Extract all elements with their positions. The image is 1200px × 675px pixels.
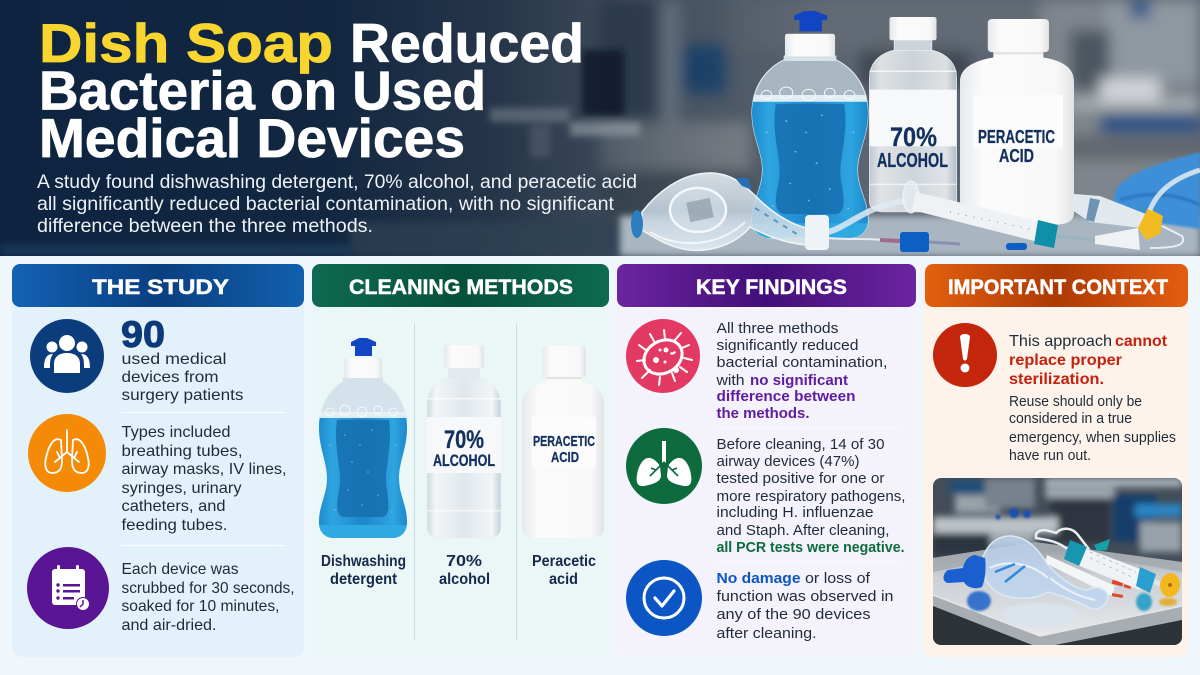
bottle: peracetic acid — [960, 19, 1074, 224]
airway mask and tube — [631, 173, 905, 250]
text: reuse note: considered in a true — [1009, 410, 1132, 427]
text: procedure: scrubbed for 30 seconds, — [122, 580, 294, 597]
method: 70% alcohol: 70% — [446, 553, 482, 570]
bottle: peracetic acid: PERACETIC — [978, 127, 1055, 147]
text: device types: catheters, and — [122, 498, 226, 515]
method: peracetic acid: ACID — [551, 449, 579, 466]
heading: the study — [12, 264, 304, 307]
heading: key findings — [617, 264, 916, 307]
subtitle: difference between the three methods. — [37, 215, 373, 237]
title — [39, 12, 584, 169]
mask — [982, 536, 1108, 609]
syringe — [1036, 529, 1088, 548]
icon: check mark — [626, 560, 702, 636]
text: procedure — [122, 561, 294, 634]
text: finding one: no significant — [750, 372, 848, 389]
method: peracetic acid: acid — [549, 571, 578, 588]
text: device types: Types included — [122, 424, 230, 441]
panel: important context — [923, 264, 1188, 657]
text: reuse note: have run out. — [1009, 447, 1091, 464]
text: finding three: No damage — [716, 570, 800, 587]
text: warning statement: cannot — [1115, 333, 1168, 350]
text: device types — [122, 424, 286, 534]
text: warning statement — [1009, 333, 1168, 388]
heading: important context: IMPORTANT CONTEXT — [948, 275, 1168, 299]
method: peracetic acid: PERACETIC — [533, 433, 595, 450]
text: device types: airway masks, IV lines, — [122, 461, 286, 478]
text: procedure: and air-dried. — [122, 617, 216, 634]
panel: cleaning methods — [312, 264, 609, 657]
title: Dish Soap — [39, 12, 333, 74]
stat: 90 devices: devices from — [122, 369, 218, 386]
heading: cleaning methods: CLEANING METHODS — [349, 275, 573, 299]
method: dishwashing detergent: Dishwashing — [321, 553, 406, 570]
method: dishwashing detergent — [315, 338, 411, 588]
text: finding one: difference between — [716, 388, 856, 405]
text: finding three: function was observed in — [716, 588, 894, 605]
stat: 90 devices: 90 — [121, 314, 165, 355]
text: finding one: with — [715, 372, 744, 389]
subtitle: all significantly reduced bacterial contamination, with no significant — [37, 193, 615, 215]
text: finding two — [716, 436, 906, 556]
method: 70% alcohol: alcohol — [439, 571, 490, 588]
method: peracetic acid: Peracetic — [532, 553, 596, 570]
text: finding one: significantly reduced — [716, 337, 858, 354]
icon: calendar — [27, 547, 109, 629]
text: device types: breathing tubes, — [122, 443, 242, 460]
text: device types: syringes, urinary — [122, 480, 242, 497]
icon: bacterium — [626, 319, 700, 393]
towel — [1114, 152, 1200, 229]
method: peracetic acid — [522, 346, 604, 588]
heading: the study: THE STUDY — [92, 275, 229, 299]
method: 70% alcohol: ALCOHOL — [433, 451, 495, 470]
panel: the study — [12, 264, 304, 657]
text: warning statement: sterilization. — [1009, 371, 1104, 388]
text: finding one: the methods. — [716, 405, 810, 422]
subtitle: A study found dishwashing detergent, 70% alcohol, and peracetic acid — [37, 171, 637, 193]
icon: warning — [933, 323, 997, 387]
icon: lungs filled — [626, 428, 702, 504]
text: finding three — [716, 570, 894, 642]
second tube — [1045, 555, 1115, 596]
text: finding three: or loss of — [805, 570, 871, 587]
text: reuse note — [1009, 393, 1176, 464]
tray reflections — [966, 590, 1178, 618]
hero background: blurred laboratory — [0, 0, 1200, 256]
text: finding two: tested positive for one or — [716, 470, 884, 487]
bottle: 70% alcohol: ALCOHOL — [877, 150, 948, 172]
text: warning statement: This approach — [1009, 333, 1112, 350]
subtitle — [37, 171, 637, 237]
stat: 90 devices: used medical — [122, 351, 226, 368]
text: finding three: after cleaning. — [716, 625, 816, 642]
text: procedure: Each device was — [122, 561, 238, 578]
method: 70% alcohol: 70% — [444, 426, 484, 454]
text: finding two: all PCR tests were negative. — [716, 539, 904, 556]
text: finding one: bacterial contamination, — [716, 354, 888, 371]
heading: key findings: KEY FINDINGS — [696, 275, 847, 299]
text: finding two: including H. influenzae — [716, 504, 874, 521]
heading: important context — [925, 264, 1188, 307]
text: finding three: any of the 90 devices — [716, 606, 870, 623]
text: reuse note: Reuse should only be — [1009, 393, 1142, 410]
icon: people — [30, 319, 104, 393]
text: procedure: soaked for 10 minutes, — [122, 598, 280, 615]
bottle: 70% alcohol: 70% — [890, 122, 937, 152]
heading: cleaning methods — [312, 264, 609, 307]
photo: used devices on steel tray — [933, 478, 1182, 650]
text: reuse note: emergency, when supplies — [1009, 429, 1176, 446]
bottle: peracetic acid: ACID — [999, 146, 1034, 166]
text: device types: feeding tubes. — [122, 517, 228, 534]
icon: lungs outline — [28, 414, 106, 492]
hero banner — [0, 0, 1200, 256]
title: Medical Devices — [39, 107, 465, 169]
method: dishwashing detergent: detergent — [330, 571, 397, 588]
syringe and connectors — [880, 170, 1200, 252]
bottle: 70% alcohol — [869, 17, 957, 212]
method: 70% alcohol — [427, 345, 501, 588]
stat: 90 devices: surgery patients — [122, 387, 244, 404]
text: finding two: airway devices (47%) — [716, 453, 860, 470]
title: Bacteria on Used — [39, 60, 486, 122]
bottle: dish soap — [747, 11, 873, 241]
text: finding one — [715, 320, 888, 422]
panel: key findings — [617, 264, 916, 657]
text: finding two: more respiratory pathogens, — [716, 488, 906, 505]
stat: 90 devices — [121, 314, 244, 404]
blue connector — [944, 555, 986, 588]
text: finding two: Before cleaning, 14 of 30 — [716, 436, 884, 453]
text: finding one: All three methods — [716, 320, 838, 337]
title: Reduced — [350, 12, 584, 74]
text: warning statement: replace proper — [1009, 352, 1122, 369]
text: finding two: and Staph. After cleaning, — [716, 522, 890, 539]
